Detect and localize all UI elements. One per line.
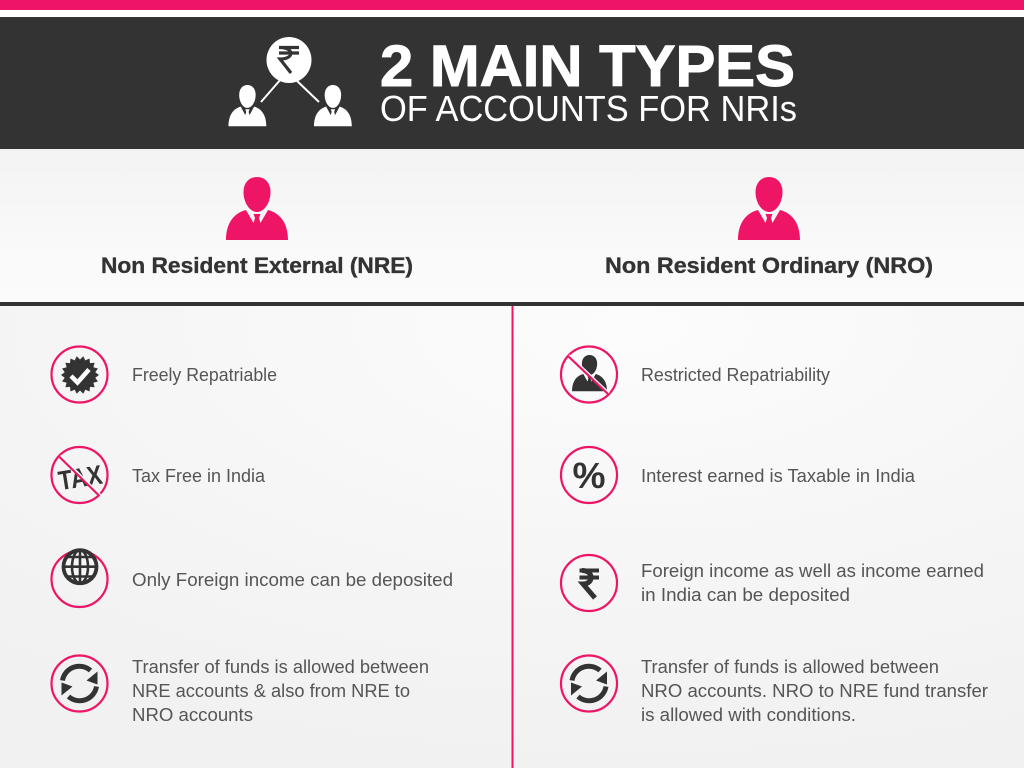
text: foreign and Indian income: Foreign income as well as income earned	[641, 560, 984, 581]
panel: column headings	[0, 149, 1024, 302]
NRO heading: Non Resident Ordinary (NRO)	[605, 253, 933, 278]
top pink stripe	[0, 0, 1024, 10]
icon: no person	[561, 346, 617, 402]
icon: rupee	[561, 555, 617, 611]
NRE heading: Non Resident External (NRE)	[101, 253, 413, 278]
text: NRE transfers: NRE accounts & also from NRE to	[132, 680, 410, 701]
text: NRO transfers	[641, 656, 988, 725]
icon: NRO person	[738, 177, 800, 240]
text: NRO transfers: is allowed with conditions.	[641, 704, 856, 725]
icon: no tax	[52, 447, 108, 503]
icon: percent	[561, 447, 617, 503]
panel: NRE features	[52, 346, 453, 725]
text: interest: Interest earned is Taxable in India	[641, 465, 916, 486]
text: foreign and Indian income: in India can be deposited	[641, 584, 850, 605]
icon: globe	[52, 550, 108, 607]
panel: NRO features	[561, 346, 988, 725]
text: freely repatriable: Freely Repatriable	[132, 364, 277, 385]
text: tax free: Tax Free in India	[132, 465, 266, 486]
icon: rupee network	[228, 37, 352, 126]
text: NRO transfers: NRO accounts. NRO to NRE fund transfer	[641, 680, 988, 701]
header banner	[0, 17, 1024, 149]
text: NRE transfers: Transfer of funds is allowed between	[132, 656, 429, 677]
subtitle: OF ACCOUNTS FOR NRIs	[380, 88, 797, 129]
text: NRE transfers	[132, 656, 429, 725]
text: restricted: Restricted Repatriability	[641, 364, 831, 385]
text: NRE transfers: NRO accounts	[132, 704, 253, 725]
icon: percent: %	[572, 455, 606, 496]
title: 2 MAIN TYPES	[380, 34, 795, 99]
text: foreign and Indian income	[641, 560, 984, 605]
text: NRO transfers: Transfer of funds is allowed between	[641, 656, 939, 677]
text: foreign income: Only Foreign income can be deposited	[132, 569, 453, 590]
icon: sync	[52, 656, 108, 712]
icon: NRE person	[226, 177, 288, 240]
icon: sync	[561, 656, 617, 712]
panel: comparison background	[0, 306, 1024, 768]
icon: no tax: TAX	[56, 460, 104, 496]
icon: verified badge	[52, 346, 108, 402]
